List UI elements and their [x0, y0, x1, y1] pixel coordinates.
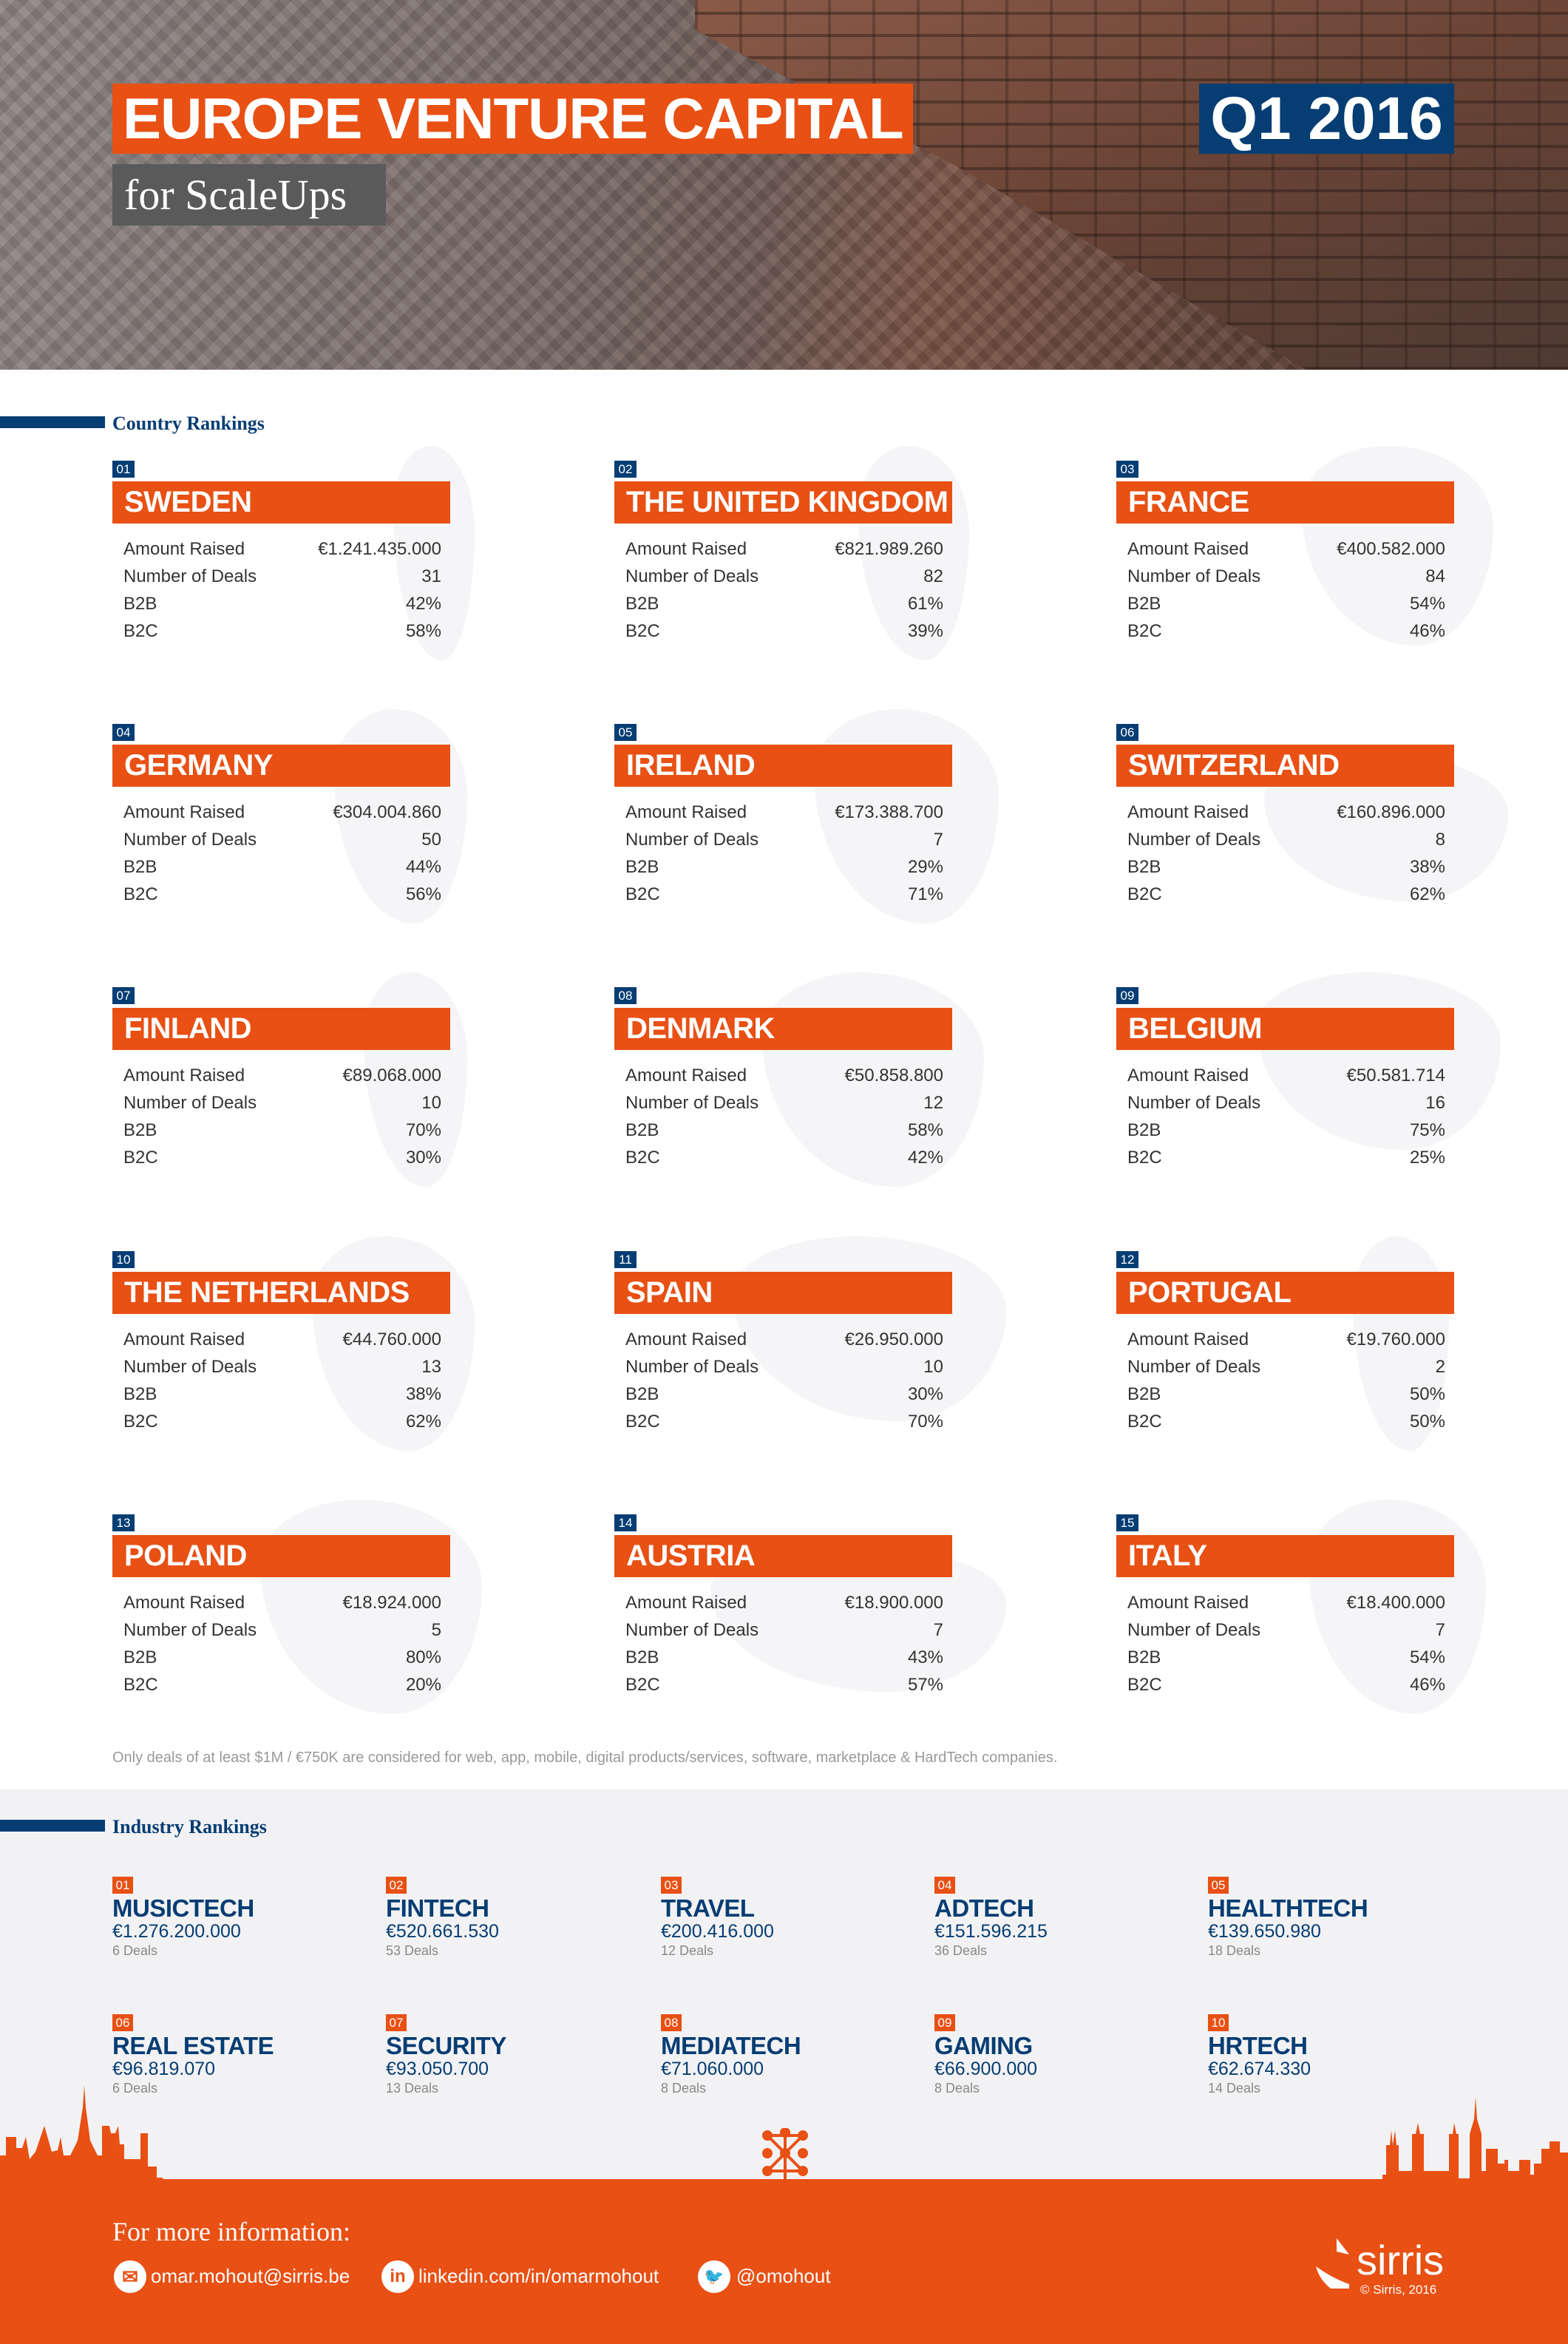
card: France: 54% — [1410, 594, 1445, 614]
card: Denmark: 08 — [619, 989, 632, 1003]
skyline: paris — [0, 2085, 163, 2179]
card: Denmark — [614, 972, 984, 1187]
card: France: B2B — [1127, 594, 1161, 614]
card: Switzerland: 8 — [1436, 830, 1445, 850]
industry: hrtech: €62.674.330 — [1208, 2059, 1311, 2079]
industry section background — [0, 1789, 1568, 2180]
industry: musictech: 6 Deals — [112, 1943, 157, 1958]
card: UK: 61% — [908, 594, 943, 614]
industry: security: SECURITY — [386, 2032, 506, 2059]
card: Spain: B2C — [625, 1412, 660, 1432]
industry: security: 07 — [390, 2016, 403, 2030]
card: Italy: 54% — [1410, 1647, 1445, 1667]
industry: musictech: 01 — [116, 1878, 129, 1892]
card: Portugal: Amount Raised — [1127, 1329, 1249, 1349]
card: Spain: 70% — [908, 1412, 943, 1432]
card: Germany: B2B — [123, 857, 157, 877]
card: Switzerland: 38% — [1410, 857, 1445, 877]
card: Netherlands: Number of Deals — [123, 1357, 257, 1377]
card: Spain: B2B — [625, 1384, 659, 1404]
industry: travel: 12 Deals — [661, 1943, 713, 1958]
card: Italy: B2C — [1127, 1675, 1162, 1695]
card: Austria: 7 — [934, 1620, 943, 1640]
card: Belgium: Amount Raised — [1127, 1066, 1249, 1085]
card: UK: THE UNITED KINGDOM — [626, 486, 948, 518]
card: Italy: B2B — [1127, 1647, 1161, 1667]
industry: mediatech: 8 Deals — [661, 2081, 706, 2096]
card: Finland: Number of Deals — [123, 1093, 257, 1113]
card: Belgium: B2C — [1127, 1148, 1162, 1168]
card: France: FRANCE — [1128, 486, 1249, 518]
card: Italy: €18.400.000 — [1347, 1593, 1445, 1613]
card: Germany: 56% — [406, 884, 441, 904]
industry: hrtech: 10 — [1212, 2016, 1225, 2030]
card: Spain: Number of Deals — [625, 1357, 758, 1377]
card: Poland: 20% — [406, 1675, 441, 1695]
card: Sweden: B2C — [123, 621, 158, 641]
card: Italy: ITALY — [1128, 1539, 1206, 1572]
card: Poland: €18.924.000 — [343, 1593, 441, 1613]
card: Sweden: Number of Deals — [123, 566, 257, 586]
card: Portugal: 12 — [1121, 1253, 1134, 1267]
card: Sweden: B2B — [123, 594, 157, 614]
title: EUROPE VENTURE CAPITAL — [123, 86, 903, 151]
card: Spain: 10 — [923, 1357, 943, 1377]
card: Belgium: 16 — [1425, 1093, 1445, 1113]
contact: linkedin: in — [390, 2266, 406, 2286]
industry: musictech — [112, 1877, 254, 1958]
section heading: country rankings: Country Rankings — [112, 413, 265, 434]
card: Netherlands: €44.760.000 — [343, 1329, 441, 1349]
industry: fintech: €520.661.530 — [386, 1921, 499, 1942]
industry: fintech: 02 — [390, 1878, 403, 1892]
card: Finland: €89.068.000 — [343, 1066, 441, 1085]
section heading: industry rankings: Industry Rankings — [112, 1816, 267, 1837]
card: UK: Amount Raised — [625, 539, 747, 559]
card: Belgium: 09 — [1121, 989, 1134, 1003]
industry: gaming: 8 Deals — [934, 2081, 980, 2096]
card: Ireland: 71% — [908, 884, 943, 904]
industry: gaming: GAMING — [934, 2032, 1033, 2059]
card: Sweden: SWEDEN — [124, 486, 252, 518]
date badge: Q1 2016 — [1210, 85, 1443, 152]
footnote: Only deals of at least $1M / €750K are considered for web, app, mobile, digital products/services, software, marketplace & HardTech companies. — [112, 1749, 1057, 1766]
industry: mediatech — [661, 2014, 801, 2096]
card: France: 46% — [1410, 621, 1445, 641]
card: France: €400.582.000 — [1337, 539, 1445, 559]
card: UK — [614, 446, 969, 660]
card: Portugal: 50% — [1410, 1412, 1445, 1432]
industry: real estate: €96.819.070 — [112, 2059, 215, 2079]
card: Netherlands: B2C — [123, 1412, 158, 1432]
industry: travel: 03 — [665, 1878, 678, 1892]
card: Austria: Number of Deals — [625, 1620, 758, 1640]
card: Finland: FINLAND — [124, 1012, 251, 1045]
card: Sweden: 31 — [421, 566, 441, 586]
card: Spain: €26.950.000 — [845, 1329, 943, 1349]
industry: healthtech: 18 Deals — [1208, 1943, 1260, 1958]
card: Poland: B2C — [123, 1675, 158, 1695]
card: Finland: 07 — [117, 989, 130, 1003]
footer — [0, 2179, 1568, 2344]
industry: real estate: 6 Deals — [112, 2081, 157, 2096]
industry: security — [386, 2014, 506, 2096]
card: Netherlands: 62% — [406, 1412, 441, 1432]
logo: sirris — [1316, 2237, 1444, 2297]
card: Poland: Number of Deals — [123, 1620, 257, 1640]
card: Austria: €18.900.000 — [845, 1593, 943, 1613]
card: Switzerland: 06 — [1121, 725, 1134, 739]
card: Germany: Amount Raised — [123, 802, 245, 822]
card: Netherlands: B2B — [123, 1384, 157, 1404]
card: Denmark: Amount Raised — [625, 1066, 747, 1085]
card: Denmark: DENMARK — [626, 1012, 775, 1045]
card: Austria: B2C — [625, 1675, 660, 1695]
card: Portugal: 2 — [1436, 1357, 1445, 1377]
industry: travel: €200.416.000 — [661, 1921, 774, 1942]
card: Portugal: PORTUGAL — [1128, 1276, 1291, 1309]
card: Ireland: IRELAND — [626, 749, 755, 782]
card: Sweden: 58% — [406, 621, 441, 641]
card: Portugal: 50% — [1410, 1384, 1445, 1404]
industry: security: 13 Deals — [386, 2081, 438, 2096]
card: Austria: 14 — [619, 1516, 632, 1530]
contact: email — [114, 2260, 350, 2293]
card: Ireland — [614, 709, 999, 924]
card: Italy — [1116, 1500, 1486, 1714]
industry: musictech: €1.276.200.000 — [112, 1921, 241, 1942]
card: Finland: 30% — [406, 1148, 441, 1168]
industry: adtech: ADTECH — [934, 1894, 1034, 1922]
card: France: Number of Deals — [1127, 566, 1260, 586]
card: France: Amount Raised — [1127, 539, 1249, 559]
industry: travel: TRAVEL — [661, 1894, 755, 1922]
card: UK: 82 — [923, 566, 943, 586]
card: Switzerland: Number of Deals — [1127, 830, 1260, 850]
card: Switzerland — [1116, 724, 1508, 904]
industry: hrtech: HRTECH — [1208, 2032, 1307, 2059]
card: Portugal — [1116, 1236, 1454, 1451]
card: Austria: B2B — [625, 1647, 659, 1667]
contact: twitter: @omohout — [736, 2265, 831, 2287]
card: Finland — [112, 972, 467, 1187]
logo: sirris: sirris — [1357, 2237, 1444, 2283]
card: Poland: Amount Raised — [123, 1593, 245, 1613]
card: Belgium: Number of Deals — [1127, 1093, 1260, 1113]
subtitle — [112, 164, 386, 226]
card: Italy: 15 — [1121, 1516, 1134, 1530]
card: UK: €821.989.260 — [835, 539, 943, 559]
industry: travel — [661, 1877, 774, 1958]
card: Spain: 30% — [908, 1384, 943, 1404]
industry: healthtech: €139.650.980 — [1208, 1921, 1321, 1942]
industry: security: €93.050.700 — [386, 2059, 489, 2079]
industry: real estate: REAL ESTATE — [112, 2032, 274, 2059]
brick wall — [695, 0, 1568, 370]
card: Austria: AUSTRIA — [626, 1539, 755, 1572]
card: Sweden: 01 — [117, 462, 130, 476]
industry: healthtech: HEALTHTECH — [1208, 1894, 1368, 1922]
card: Spain: Amount Raised — [625, 1329, 747, 1349]
card: Finland: Amount Raised — [123, 1066, 245, 1085]
card: Switzerland: SWITZERLAND — [1128, 749, 1340, 782]
card: Ireland: 29% — [908, 857, 943, 877]
industry: gaming: 09 — [938, 2016, 951, 2030]
card: Portugal: B2B — [1127, 1384, 1161, 1404]
card: Ireland: B2C — [625, 884, 660, 904]
contact: linkedin: linkedin.com/in/omarmohout — [418, 2265, 659, 2287]
card: UK: 02 — [619, 462, 632, 476]
card: Germany: 50 — [421, 830, 441, 850]
card: UK: B2C — [625, 621, 660, 641]
card: France: 84 — [1425, 566, 1445, 586]
card: Sweden: Amount Raised — [123, 539, 245, 559]
card: Ireland: Amount Raised — [625, 802, 747, 822]
industry: gaming: €66.900.000 — [934, 2059, 1037, 2079]
industry: hrtech — [1208, 2014, 1311, 2096]
card: Poland: 5 — [432, 1620, 441, 1640]
card: Germany: B2C — [123, 884, 158, 904]
card: Germany — [112, 709, 467, 924]
card: Ireland: B2B — [625, 857, 659, 877]
card: Denmark: B2C — [625, 1148, 660, 1168]
card: France: B2C — [1127, 621, 1162, 641]
card: Spain — [614, 1236, 1006, 1432]
industry: musictech: MUSICTECH — [112, 1894, 254, 1922]
card: Ireland: €173.388.700 — [835, 802, 943, 822]
card: Finland: B2B — [123, 1120, 157, 1140]
card: Spain: SPAIN — [626, 1276, 713, 1309]
card: Italy: 46% — [1410, 1675, 1445, 1695]
contact: linkedin — [381, 2260, 659, 2293]
card: Spain: 11 — [619, 1253, 632, 1267]
card: Switzerland: B2B — [1127, 857, 1161, 877]
card: Denmark: Number of Deals — [625, 1093, 758, 1113]
card: Switzerland: B2C — [1127, 884, 1162, 904]
card: Sweden: 42% — [406, 594, 441, 614]
card: Finland: 70% — [406, 1120, 441, 1140]
card: Belgium: B2B — [1127, 1120, 1161, 1140]
industry: real estate — [112, 2014, 274, 2096]
card: Ireland: 7 — [934, 830, 943, 850]
industry: healthtech — [1208, 1877, 1368, 1958]
industry: adtech: 04 — [938, 1878, 951, 1892]
card: Poland: 13 — [117, 1516, 130, 1530]
card: Denmark: 58% — [908, 1120, 943, 1140]
contact: email: ✉ — [122, 2266, 138, 2288]
card: France — [1116, 446, 1493, 646]
industry: fintech: 53 Deals — [386, 1943, 438, 1958]
card: Poland: 80% — [406, 1647, 441, 1667]
industry: gaming — [934, 2014, 1037, 2096]
section heading: country rankings — [0, 413, 265, 434]
card: Belgium: €50.581.714 — [1347, 1066, 1445, 1085]
footer heading: For more information: — [112, 2217, 350, 2246]
card: Sweden — [112, 446, 475, 660]
card: Poland: B2B — [123, 1647, 157, 1667]
subtitle: for ScaleUps — [124, 171, 347, 219]
skyline: london — [1382, 2097, 1568, 2179]
card: Ireland: 05 — [619, 725, 632, 739]
card: Denmark: B2B — [625, 1120, 659, 1140]
card: Poland: POLAND — [124, 1539, 247, 1572]
logo: sirris: © Sirris, 2016 — [1360, 2283, 1436, 2297]
card: Belgium: 75% — [1410, 1120, 1445, 1140]
card: Finland: 10 — [421, 1093, 441, 1113]
card: Austria — [614, 1514, 1006, 1695]
card: Germany: €304.004.860 — [333, 802, 441, 822]
card: Netherlands: Amount Raised — [123, 1329, 245, 1349]
card: Denmark: 12 — [923, 1093, 943, 1113]
industry: real estate: 06 — [116, 2016, 129, 2030]
card: UK: Number of Deals — [625, 566, 758, 586]
card: Belgium — [1116, 972, 1501, 1168]
card: Germany: Number of Deals — [123, 830, 257, 850]
card: Germany: GERMANY — [124, 749, 273, 782]
contact: twitter: 🐦 — [704, 2267, 724, 2286]
card: Poland — [112, 1500, 482, 1714]
card: Denmark: 42% — [908, 1148, 943, 1168]
industry: fintech — [386, 1877, 499, 1958]
card: Italy: Amount Raised — [1127, 1593, 1249, 1613]
industry: mediatech: 08 — [665, 2016, 678, 2030]
card: Belgium: 25% — [1410, 1148, 1445, 1168]
industry: hrtech: 14 Deals — [1208, 2081, 1260, 2096]
card: Switzerland: Amount Raised — [1127, 802, 1249, 822]
card: Netherlands: 38% — [406, 1384, 441, 1404]
industry: adtech: 36 Deals — [934, 1943, 987, 1958]
industry: fintech: FINTECH — [386, 1894, 489, 1922]
section heading: industry rankings — [0, 1816, 267, 1837]
card: Italy: Number of Deals — [1127, 1620, 1260, 1640]
card: Austria: 43% — [908, 1647, 943, 1667]
card: France: 03 — [1121, 462, 1134, 476]
card: Germany: 04 — [117, 725, 130, 739]
card: Austria: 57% — [908, 1675, 943, 1695]
contact: email: omar.mohout@sirris.be — [151, 2265, 350, 2287]
card: Denmark: €50.858.800 — [845, 1066, 943, 1085]
card: Netherlands: 13 — [421, 1357, 441, 1377]
card: Switzerland: 62% — [1410, 884, 1445, 904]
card: Italy: 7 — [1436, 1620, 1445, 1640]
card: UK: B2B — [625, 594, 659, 614]
contact: twitter — [698, 2260, 831, 2293]
card: UK: 39% — [908, 621, 943, 641]
industry: mediatech: €71.060.000 — [661, 2059, 764, 2079]
card: Portugal: B2C — [1127, 1412, 1162, 1432]
card: Netherlands: 10 — [117, 1253, 130, 1267]
card: Belgium: BELGIUM — [1128, 1012, 1262, 1045]
industry: adtech: €151.596.215 — [934, 1921, 1048, 1942]
card: Sweden: €1.241.435.000 — [318, 539, 441, 559]
header photo — [0, 0, 1568, 370]
icon: atomium — [762, 2128, 808, 2179]
card: Switzerland: €160.896.000 — [1337, 802, 1445, 822]
card: Netherlands — [112, 1236, 475, 1451]
industry: mediatech: MEDIATECH — [661, 2032, 801, 2059]
card: Austria: Amount Raised — [625, 1593, 747, 1613]
card: Portugal: Number of Deals — [1127, 1357, 1260, 1377]
card: Germany: 44% — [406, 857, 441, 877]
industry: adtech — [934, 1877, 1048, 1958]
industry: healthtech: 05 — [1212, 1878, 1225, 1892]
card: Ireland: Number of Deals — [625, 830, 758, 850]
card: Netherlands: THE NETHERLANDS — [124, 1276, 410, 1309]
card: Finland: B2C — [123, 1148, 158, 1168]
card: Portugal: €19.760.000 — [1347, 1329, 1445, 1349]
